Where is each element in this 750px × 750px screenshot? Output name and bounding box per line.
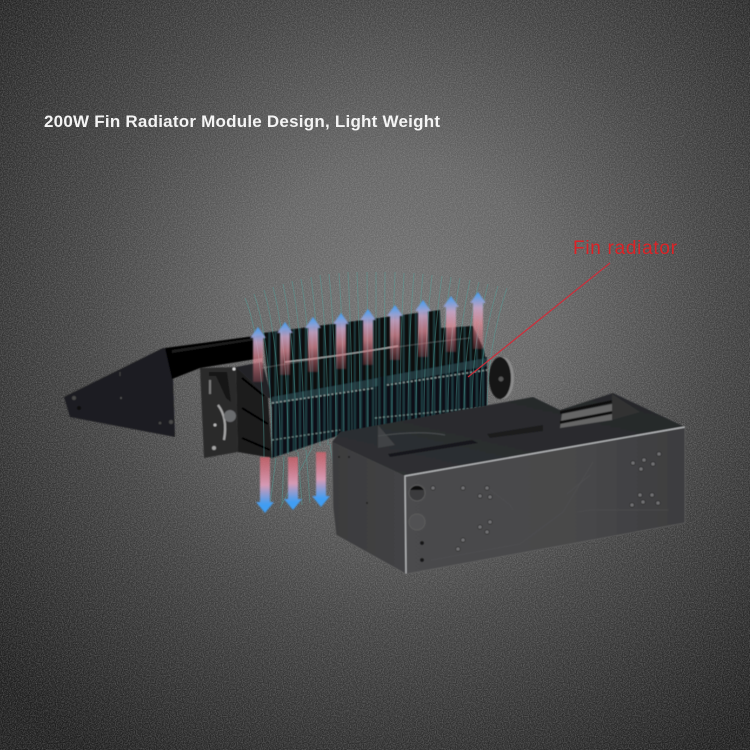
arrow down 3 bbox=[312, 452, 330, 507]
arrow up 7 bbox=[415, 300, 431, 357]
arrow up 1 bbox=[250, 327, 266, 382]
fan end plate bbox=[200, 362, 272, 458]
title: 200W Fin Radiator Module Design, Light Weight bbox=[44, 112, 440, 131]
rear fins bbox=[262, 310, 487, 408]
downward heat arrows bbox=[256, 452, 330, 513]
end disk bbox=[489, 357, 514, 399]
front etched lines bbox=[432, 462, 668, 560]
arrow down 2 bbox=[284, 457, 302, 510]
upward heat arrows bbox=[250, 292, 486, 382]
rivets bbox=[431, 452, 661, 551]
housing front bbox=[405, 427, 685, 574]
arrow up 4 bbox=[333, 313, 349, 369]
arrow up 9 bbox=[470, 292, 486, 349]
arrow up 3 bbox=[305, 317, 321, 372]
side screws bbox=[338, 456, 368, 504]
label: fin radiator: Fin radiator bbox=[573, 238, 678, 259]
arrow up 5 bbox=[360, 309, 376, 365]
power supply housing bbox=[332, 393, 685, 574]
red leader line bbox=[468, 263, 610, 377]
airflow streaks bbox=[245, 272, 507, 508]
arrow down 1 bbox=[256, 457, 274, 513]
top surface slots bbox=[378, 425, 543, 457]
housing left side bbox=[332, 442, 406, 574]
arrow up 2 bbox=[277, 322, 293, 375]
arrow up 8 bbox=[443, 296, 459, 352]
mounting bracket plate bbox=[64, 348, 175, 437]
arrow up 6 bbox=[387, 305, 403, 360]
bright edges bbox=[405, 427, 685, 574]
front fins bbox=[272, 357, 487, 458]
rear cutout bars bbox=[560, 394, 640, 428]
product: heat sink module bbox=[64, 310, 514, 458]
black side rail bbox=[165, 335, 262, 379]
housing top bbox=[332, 393, 685, 476]
port holes bbox=[409, 485, 425, 562]
